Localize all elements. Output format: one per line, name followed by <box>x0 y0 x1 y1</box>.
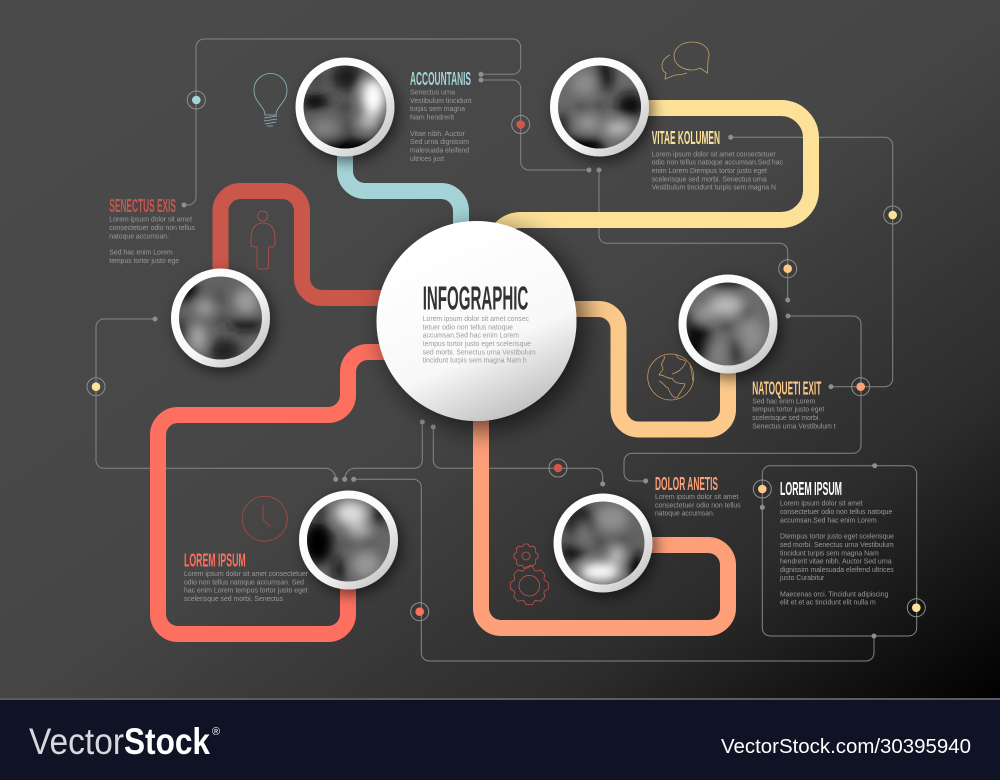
text block: lorem ipsum coral: Lorem ipsum dolor sit amet consectetuer <box>184 569 308 578</box>
text block: natoqueti exit: Sed hac enim Lorem <box>752 396 815 405</box>
text block: lorem ipsum white: Maecenas orci. Tincidunt adipiscing <box>780 589 888 598</box>
central body text: tempus tortor justo eget scelerisque <box>423 339 531 348</box>
text block: lorem ipsum white: LOREM IPSUM <box>780 478 842 499</box>
text block: lorem ipsum white: accumsan.Sed hac enim Lorem <box>780 515 877 524</box>
photo circle: lorem ipsum coral <box>296 488 401 593</box>
thin connector lines <box>96 39 917 661</box>
text block: natoqueti exit: scelerisque sed morbi. <box>752 413 820 422</box>
text block: natoqueti exit <box>752 377 836 430</box>
pipe: teal <box>345 140 461 250</box>
icon: gears <box>510 544 548 605</box>
text block: lorem ipsum coral <box>184 550 308 603</box>
central body text: tincidunt turpis sem magna Nam h <box>423 355 527 364</box>
text block: lorem ipsum white: Lorem ipsum dolor sit amet <box>780 499 863 508</box>
text block: accountanis: Nam hendrerit <box>410 112 454 122</box>
text block: dolor anetis <box>655 473 741 518</box>
text block: vitae kolumen: Lorem ipsum dolor sit amet consectetuer <box>652 149 776 158</box>
icon: chat bubbles <box>662 42 709 79</box>
text block: dolor anetis: DOLOR ANETIS <box>655 473 718 494</box>
text block: lorem ipsum white: consectetuer odio non tellus natoque <box>780 507 892 516</box>
central body text: Lorem ipsum dolor sit amet consec <box>423 314 529 323</box>
photo circle: dolor anetis <box>550 490 655 595</box>
footer bar: ® <box>212 726 220 738</box>
footer bar: VectorStock.com/30395940 <box>721 736 971 758</box>
central circle <box>376 221 576 421</box>
text block: lorem ipsum coral: LOREM IPSUM <box>184 550 246 571</box>
photo circle: vitae kolumen <box>548 55 653 160</box>
footer bar: Vector <box>29 721 124 762</box>
text block: vitae kolumen: Vestibulum tincidunt turpis sem magna N <box>652 183 776 192</box>
icon: clock <box>242 496 287 541</box>
text block: lorem ipsum white: justo Curabitur <box>779 573 825 582</box>
central body text: sed morbi. Senectus urna Vestibulum <box>423 347 536 356</box>
photo circle: senectus exis <box>168 266 273 371</box>
text block: lorem ipsum coral: odio non tellus natoque accumsan. Sed <box>184 577 304 586</box>
text block: natoqueti exit: tempus tortor justo eget <box>752 405 824 414</box>
text block: senectus exis: Lorem ipsum dolor sit amet <box>109 215 192 224</box>
photo circle: accountanis <box>295 55 400 162</box>
text block: accountanis: Vestibulum tincidunt <box>410 96 472 105</box>
pipe: salmon <box>481 400 728 628</box>
footer bar <box>0 698 1000 780</box>
text block: vitae kolumen: VITAE KOLUMEN <box>652 127 720 148</box>
photo circle: natoqueti exit <box>676 272 781 377</box>
central body text: accumsan.Sed hac enim Lorem <box>423 331 519 340</box>
text block: accountanis <box>410 68 472 163</box>
pipe: yellow <box>494 108 811 240</box>
text block: lorem ipsum white: tincidunt turpis sem magna Nam <box>780 548 879 557</box>
text block: accountanis: malesuada eleifend <box>410 146 469 154</box>
central body text <box>423 314 536 364</box>
text block: senectus exis: SENECTUS EXIS <box>109 195 176 216</box>
text block: lorem ipsum white: elit et et ac tincidunt elit nulla m <box>780 598 876 607</box>
text block: senectus exis: tempus tortor justo ege <box>109 256 179 265</box>
text block: senectus exis: consectetuer odio non tellus <box>109 223 195 232</box>
text block: vitae kolumen: scelerisque sed morbi. Senectus urna <box>652 174 768 183</box>
text block: dolor anetis: consectetuer odio non tellus <box>655 500 741 509</box>
text block: accountanis: Sed urna dignissim <box>410 137 469 146</box>
pipe: light orange <box>560 309 728 430</box>
footer bar: Stock <box>124 721 210 762</box>
text block: lorem ipsum coral: hac enim Lorem tempus tortor justo eget <box>184 586 308 595</box>
text block: senectus exis: natoque accumsan. <box>109 231 169 240</box>
text block: accountanis: Vitae nibh. Auctor <box>410 129 466 138</box>
infographic canvas: ACCOUNTANIS <box>410 68 471 89</box>
text block: natoqueti exit: Senectus urna Vestibulum t <box>752 421 836 430</box>
text block: senectus exis <box>109 195 195 265</box>
text block: lorem ipsum white: sed morbi. Senectus urna Vestibulum <box>780 540 894 549</box>
target markers <box>87 91 925 621</box>
central body text: tetuer odio non tellus natoque <box>423 322 513 331</box>
connector end dots <box>152 72 877 639</box>
central circle: INFOGRAPHIC <box>423 279 528 316</box>
text block: accountanis: turpis sem magna <box>410 104 466 113</box>
text block: natoqueti exit: NATOQUETI EXIT <box>752 377 822 398</box>
text block: lorem ipsum coral: scelerisque sed morbi. Senectus <box>184 594 283 603</box>
text block: vitae kolumen: enim Lorem Diempus tortor justo eget <box>652 166 767 175</box>
pipe: red <box>220 191 395 300</box>
text block: lorem ipsum white: dignissim malesuada eleifend ultrices <box>780 565 894 574</box>
text block: dolor anetis: natoque accumsan. <box>655 509 715 518</box>
text block: lorem ipsum white: Dtempus tortor justo eget scelerisque <box>780 532 894 541</box>
text block: accountanis: Senectus urna <box>410 88 456 96</box>
icon: person <box>251 211 275 269</box>
text block: lorem ipsum white: hendrerit vitae nibh. Auctor Sed urna <box>780 557 893 566</box>
text block: senectus exis: Sed hac enim Lorem <box>109 248 173 257</box>
icon: light bulb <box>254 74 287 126</box>
text block: lorem ipsum white <box>779 478 894 607</box>
text block: accountanis: ultrices just <box>410 154 444 163</box>
text block: vitae kolumen <box>652 127 783 192</box>
text block: vitae kolumen: odio non tellus natoque accumsan.Sed hac <box>652 158 783 167</box>
text block: dolor anetis: Lorem ipsum dolor sit amet <box>655 492 738 501</box>
icon: globe <box>648 354 694 400</box>
pipe: coral <box>158 352 395 634</box>
